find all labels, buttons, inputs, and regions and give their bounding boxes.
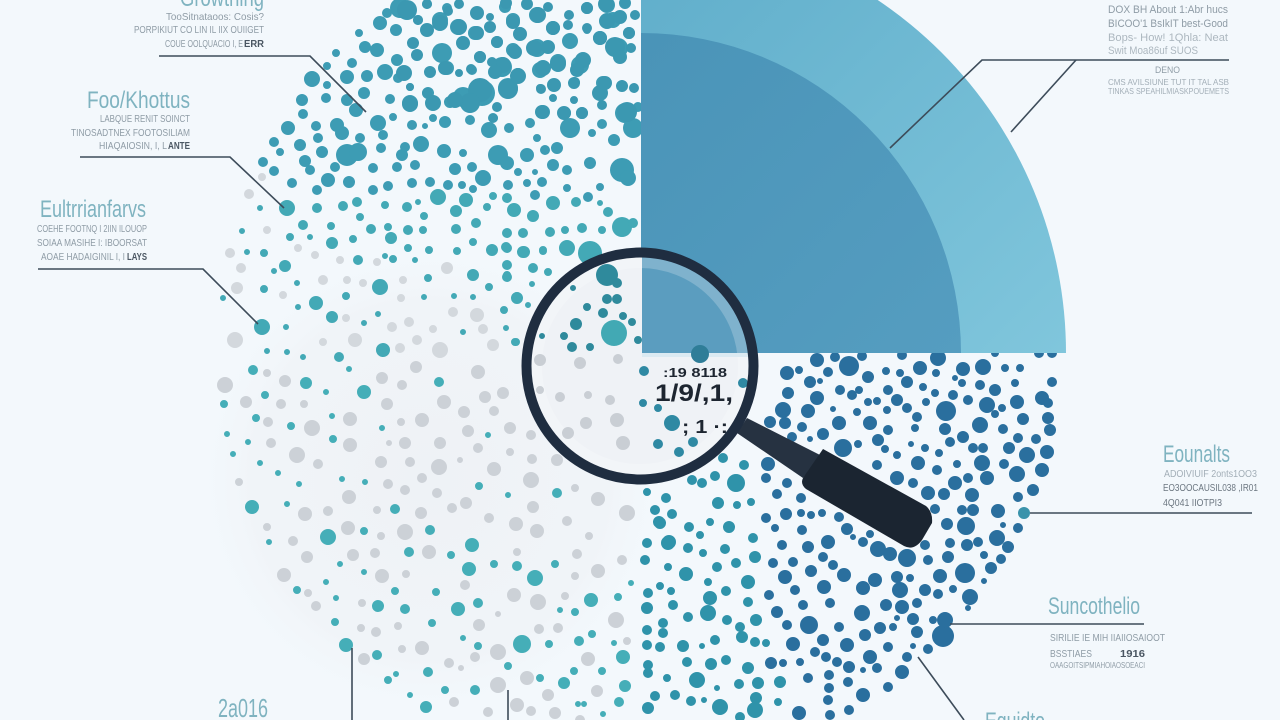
label: third left xyxy=(37,196,147,263)
anchor dot on right leader xyxy=(1018,507,1030,519)
dot cloud: dense top cluster xyxy=(404,3,635,118)
dot cloud: lower-left grey dots xyxy=(225,367,627,720)
magnified digits: :19 8118 xyxy=(663,365,727,380)
handle: thin neck xyxy=(737,418,822,478)
label: right upper: ADOIVIUIF 2onts1OO3 xyxy=(1164,468,1257,480)
label: top right: BICOO'1 BsIkIT best-Good xyxy=(1108,18,1228,30)
handle: grip xyxy=(802,449,932,548)
label: top right: DOX BH About 1:Abr hucs xyxy=(1108,4,1228,16)
label: top left xyxy=(134,0,264,50)
label: right upper: 4Q041 IIOTPI3 xyxy=(1163,497,1222,509)
label: second left: ANTE xyxy=(168,140,190,152)
soft halo behind grey dots xyxy=(190,240,670,720)
pie: outer light blue sector xyxy=(641,0,1066,353)
label: top right: Bops- How! 1Qhla: Neat xyxy=(1108,32,1228,44)
label: second left: HIAQAIOSIN, I, L xyxy=(99,140,167,152)
label: right upper xyxy=(1163,441,1258,509)
lens ring xyxy=(526,252,754,480)
label: third left: SOIAA MASIHE I: IBOORSAT xyxy=(37,237,147,249)
label: right upper: Eounalts xyxy=(1163,441,1230,468)
label: second left: TINOSADTNEX FOOTOSILIAM xyxy=(71,127,190,139)
dot cloud: lower-left teal dots xyxy=(224,369,631,714)
label: third left: Eultrrianfarvs xyxy=(40,196,146,223)
pie: inner darker blue sector xyxy=(641,33,961,353)
dot cloud: lower-centre blue-teal dots xyxy=(645,458,780,717)
label: top right: Swit Moa86uf SUOS xyxy=(1108,45,1198,57)
magnified digits: 1/9/,1, xyxy=(655,380,733,407)
label: top right: TINKAS SPEAHILMIASKPOUEMETS xyxy=(1108,87,1229,96)
label: right lower: OAAGOITSIPMIAHOIAOSOEACI xyxy=(1050,661,1145,670)
label: top right: CMS AVILSIUNE TUT IT TAL ASB xyxy=(1108,78,1229,87)
label: third left: AOAE HADAIGINIL I, I xyxy=(41,251,125,263)
dot cloud: grey dots upper band xyxy=(230,177,493,350)
label: second left: LABQUE RENIT SOINCT xyxy=(100,113,190,125)
label: top left: PORPIKIUT CO LIN IL IIX OUIIGET xyxy=(134,24,264,36)
lens glass with magnified content xyxy=(530,255,752,477)
label: right lower: SIRILIE IE MIH IIAIIOSAIOOT xyxy=(1050,632,1165,644)
magnified digits: ; 1 ·: xyxy=(682,417,728,437)
label: right lower: 1916 xyxy=(1120,648,1145,660)
magnified digits xyxy=(655,365,733,437)
magnifying glass xyxy=(526,252,932,548)
label: second left xyxy=(71,87,190,152)
label: second left: Foo/Khottus xyxy=(87,87,190,114)
label: right lower: Suncothelio xyxy=(1048,593,1140,620)
label: top left: TooSitnataoos: Cosis? xyxy=(166,11,264,23)
label: right lower: BSSTIAES xyxy=(1050,648,1092,660)
dot cloud: lower-right dark blue dots xyxy=(766,353,1052,715)
dot cloud: upper-left teal dots xyxy=(263,4,638,197)
label: top right xyxy=(1108,4,1229,96)
label: third left: LAYS xyxy=(127,251,147,263)
label: top left: ERR xyxy=(244,38,264,50)
label: right lower xyxy=(1048,593,1165,670)
dot cloud: middle-left teal dots xyxy=(223,196,633,357)
label: third left: COEHE FOOTNQ I 2IIN ILOUOP xyxy=(37,223,147,235)
label: top left: COUE OOLQUACIO I, E xyxy=(165,38,243,50)
label: top right: DENO xyxy=(1155,65,1180,75)
